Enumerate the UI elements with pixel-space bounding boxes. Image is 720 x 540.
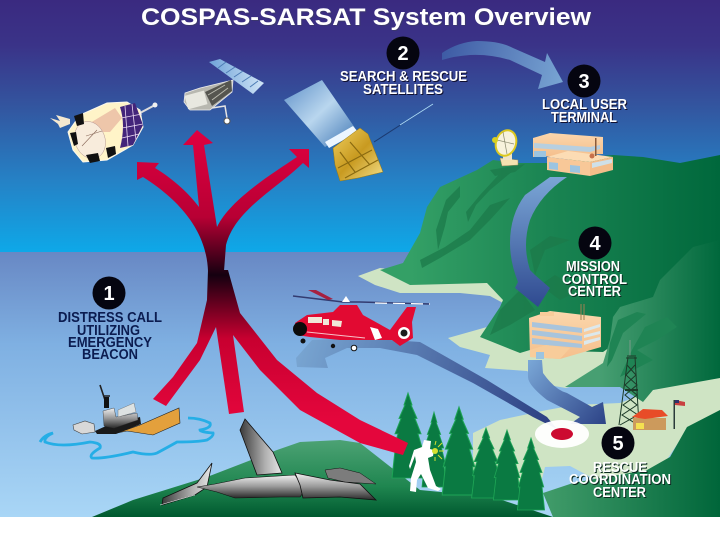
step 4: mission control center: MISSION	[566, 259, 620, 275]
step 2: search and rescue satellites: SEARCH & RESCUE	[340, 69, 467, 85]
title: COSPAS-SARSAT System Overview	[141, 4, 591, 31]
arrow: helicopter to rescue target	[296, 338, 557, 429]
land: upper hillside	[380, 155, 720, 353]
forest	[392, 393, 545, 510]
step 5: rescue coordination center: CENTER	[593, 485, 646, 501]
step 4: mission control center: CONTROL	[562, 272, 627, 288]
step 2: search and rescue satellites	[340, 36, 467, 98]
icon: survivor with signal	[409, 440, 444, 492]
icon: house and flag	[632, 400, 685, 430]
step 1: distress call: UTILIZING	[77, 323, 140, 339]
icon: local user terminal building	[533, 133, 613, 176]
land: hillside shading	[420, 164, 580, 335]
icon: distress ship	[40, 385, 213, 458]
icon: crashed airplane	[160, 419, 376, 505]
step 5: rescue coordination center	[569, 426, 671, 501]
step 2: search and rescue satellites: SATELLITES	[363, 82, 443, 98]
arrow: signals up to satellites	[137, 130, 309, 271]
arrow: beacon signals from ship, wreck and survivor	[153, 270, 408, 455]
white bottom band	[0, 517, 720, 540]
step 5: rescue coordination center: 5	[612, 433, 624, 455]
arrow: mission control to rescue coordination center	[528, 360, 606, 424]
step 1: distress call	[58, 276, 162, 363]
step 3: local user terminal: LOCAL USER	[542, 97, 627, 113]
arrow: satellites to local user terminal	[442, 41, 563, 89]
icon: satellite center	[184, 59, 264, 124]
land: right mountain	[565, 240, 720, 402]
arrows: red distress signals	[137, 130, 408, 455]
step 3: local user terminal: TERMINAL	[551, 110, 617, 126]
arrow: local user terminal to mission control	[510, 177, 567, 307]
step 5: rescue coordination center: COORDINATION	[569, 472, 671, 488]
land: right mountain shading	[607, 312, 677, 377]
background: sky	[0, 0, 720, 252]
step 1: distress call: EMERGENCY	[68, 335, 152, 351]
step 5: rescue coordination center: RESCUE	[593, 460, 647, 476]
icon: rescue target	[535, 420, 589, 448]
background: sea	[0, 252, 720, 517]
step 4: mission control center: CENTER	[568, 284, 621, 300]
icon: radio tower	[619, 340, 639, 425]
land: lower right shore	[543, 410, 720, 517]
coastline: light green shore	[358, 268, 720, 495]
step 1: distress call: BEACON	[82, 347, 138, 363]
step 4: mission control center: 4	[590, 233, 602, 255]
icon: satellite left	[50, 102, 158, 163]
step 1: distress call: 1	[104, 283, 115, 305]
step 4: mission control center	[562, 226, 627, 300]
land: foreground hill	[92, 440, 553, 517]
step 2: search and rescue satellites: 2	[398, 43, 409, 65]
step 3: local user terminal: 3	[578, 71, 590, 93]
step 3: local user terminal	[542, 64, 627, 126]
icon: radio dish	[492, 128, 520, 166]
icon: satellite right	[284, 80, 433, 181]
step 1: distress call: DISTRESS CALL	[58, 310, 162, 326]
icon: mission control center building	[529, 304, 601, 359]
icon: helicopter	[293, 290, 430, 351]
